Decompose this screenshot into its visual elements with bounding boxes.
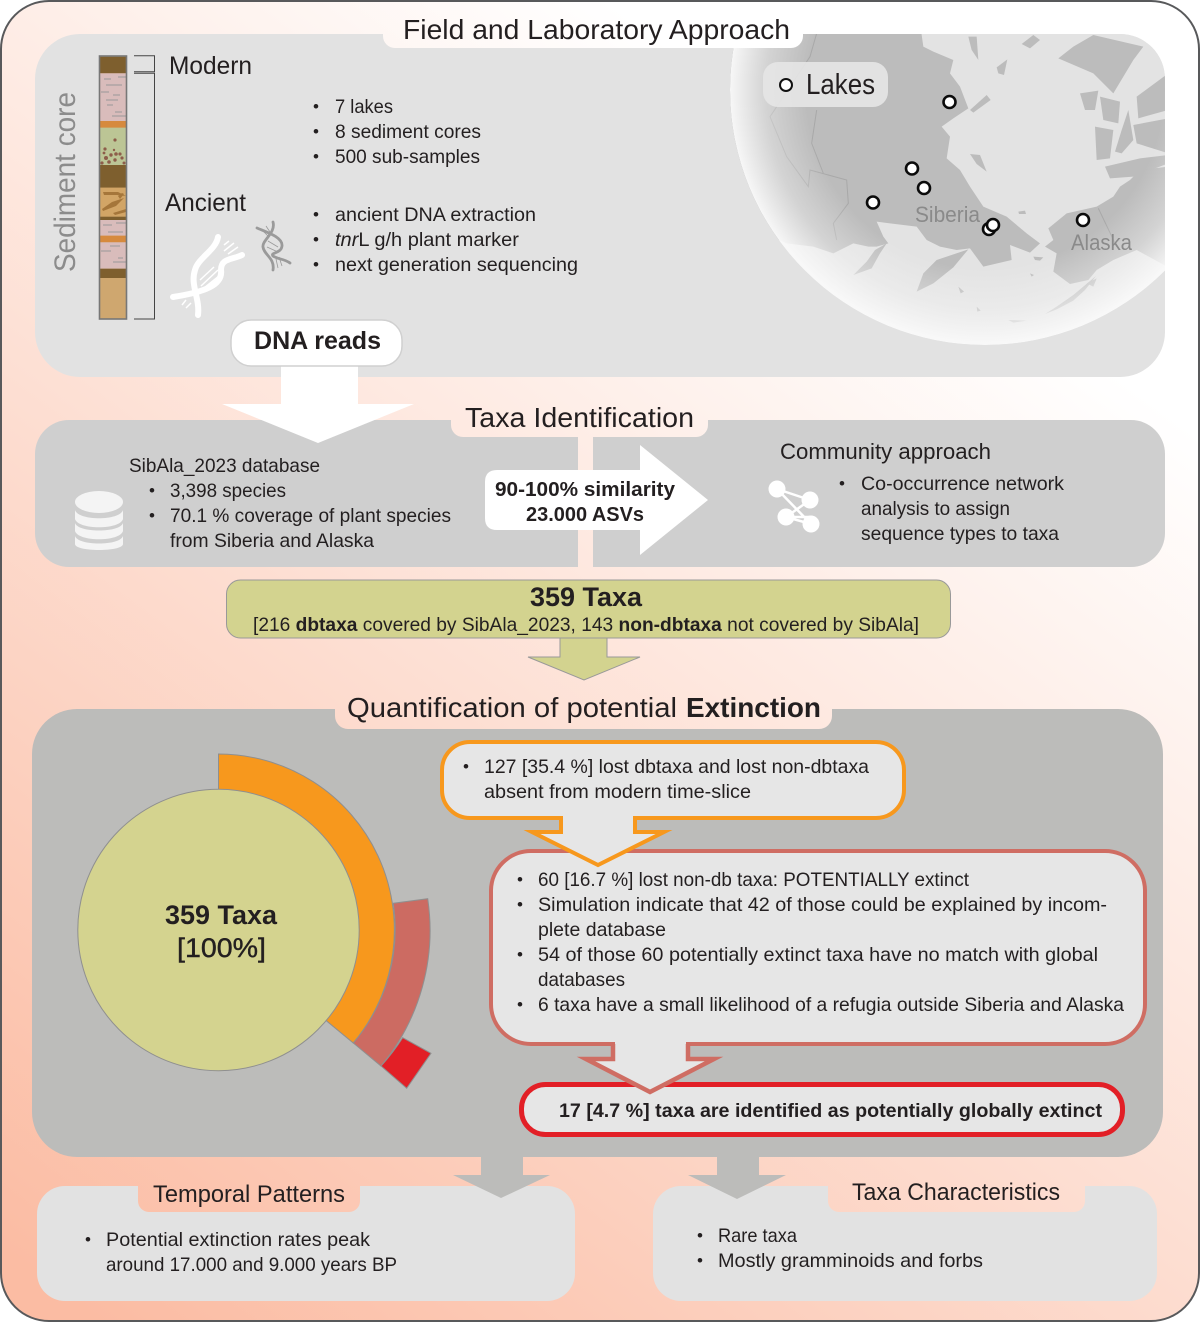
panel: taxa characteristics: • — [697, 1226, 703, 1245]
list: laboratory methods: • — [313, 255, 319, 274]
panel title: taxa identification: Taxa Identification — [465, 402, 694, 433]
panel title: field and laboratory approach — [383, 6, 803, 48]
chart label: 359 taxa — [165, 900, 278, 963]
panel title: taxa characteristics: Taxa Characteristics — [852, 1179, 1060, 1206]
list: field sampling: • — [313, 147, 319, 166]
panel title: field and laboratory approach: Field and Laboratory Approach — [403, 14, 790, 45]
box: 359 taxa summary: [216 dbtaxa covered by SibAla_2023, 143 non-dbtaxa not covered by SibAla] — [253, 614, 919, 636]
callout: lost taxa: • — [517, 870, 523, 889]
callout: lost taxa: • — [517, 995, 523, 1014]
text: SibAla database: 70.1 % coverage of plant species — [170, 505, 451, 527]
arrow: orange — [532, 814, 664, 865]
panel title: quantification of potential extinction — [335, 686, 832, 729]
arrow: pink — [586, 1040, 714, 1092]
callout: lost taxa: 60 [16.7 %] lost non-db taxa: POTENTIALLY extinct — [538, 869, 970, 891]
panel title: temporal patterns — [138, 1170, 360, 1212]
map label: Alaska: Alaska — [1071, 230, 1133, 255]
panel: field and laboratory approach — [35, 34, 1165, 377]
panel title: taxa characteristics — [828, 1170, 1085, 1212]
callout: absent from modern: • — [463, 757, 469, 776]
label: DNA reads: DNA reads — [254, 327, 381, 355]
text: SibAla database: • — [149, 481, 155, 500]
text: SibAla database — [129, 455, 451, 552]
label: sediment core: Sediment core — [49, 92, 82, 272]
arrow: similarity — [485, 445, 708, 555]
list: field sampling: 500 sub-samples — [335, 146, 480, 168]
text: community approach: • — [839, 474, 845, 493]
panel: temporal patterns: around 17.000 and 9.000 years BP — [106, 1254, 397, 1276]
arrow: to taxa characteristics — [688, 1155, 786, 1199]
panel: taxa characteristics — [653, 1186, 1157, 1301]
band: 359 taxa arrow — [528, 630, 640, 680]
label: Modern: Modern — [169, 52, 252, 80]
list: laboratory methods — [313, 204, 578, 276]
text: community approach: analysis to assign — [861, 498, 1010, 520]
callout: absent from modern: 127 [35.4 %] lost dbtaxa and lost non-dbtaxa — [484, 756, 869, 778]
panel: taxa characteristics: • — [697, 1251, 703, 1270]
legend: lakes: Lakes — [806, 69, 875, 101]
callout: lost taxa: 54 of those 60 potentially extinct taxa have no match with global — [538, 944, 1098, 966]
list: field sampling: • — [313, 122, 319, 141]
text: community approach: sequence types to taxa — [861, 523, 1059, 545]
panel: temporal patterns: Potential extinction rates peak — [106, 1229, 370, 1251]
text: SibAla database: 3,398 species — [170, 480, 286, 502]
list: laboratory methods: tnrL g/h plant marker — [335, 229, 520, 251]
callout: lost taxa: • — [517, 895, 523, 914]
text: SibAla database: from Siberia and Alaska — [170, 530, 374, 552]
label: DNA reads — [231, 320, 402, 366]
text: SibAla database: SibAla_2023 database — [129, 455, 320, 477]
arrow: DNA reads to taxa identification — [222, 360, 414, 443]
list: field sampling: 7 lakes — [335, 96, 393, 118]
list: laboratory methods: next generation sequencing — [335, 254, 578, 276]
map label: Siberia: Siberia — [915, 202, 981, 227]
label: Ancient: Ancient — [165, 189, 246, 217]
callout: globally extinct: 17 [4.7 %] taxa are identified as potentially globally extinct — [559, 1100, 1102, 1122]
panel: taxa characteristics: Rare taxa — [718, 1225, 797, 1247]
chart: nested taxa wheel — [78, 754, 431, 1088]
text: community approach: Community approach — [780, 439, 991, 464]
icon: network — [768, 480, 820, 532]
panel: temporal patterns: • — [85, 1230, 91, 1249]
callout: globally extinct — [522, 1084, 1122, 1134]
text: community approach — [780, 439, 1064, 545]
callout: lost taxa: databases — [538, 969, 625, 991]
panel: taxa characteristics: Mostly gramminoids and forbs — [718, 1250, 983, 1272]
callout: absent from modern — [442, 742, 904, 818]
brackets — [134, 56, 154, 319]
panel: quantification of potential extinction — [32, 709, 1163, 1157]
arrow: similarity: 90-100% similarity — [495, 479, 676, 501]
icon: grey DNA helix — [257, 222, 290, 270]
chart label: 359 taxa: [100%] — [177, 933, 266, 963]
panel: taxa identification — [35, 420, 1165, 570]
sediment core column — [100, 56, 126, 319]
panel title: temporal patterns: Temporal Patterns — [153, 1181, 345, 1208]
text: SibAla database: • — [149, 506, 155, 525]
list: laboratory methods: • — [313, 205, 319, 224]
icon: database — [75, 491, 123, 550]
box: 359 taxa summary — [226, 580, 950, 638]
list: laboratory methods: • — [313, 230, 319, 249]
callout: lost taxa — [491, 851, 1145, 1044]
list: laboratory methods: ancient DNA extraction — [335, 204, 536, 226]
callout: lost taxa: Simulation indicate that 42 of those could be explained by incom- — [538, 894, 1107, 916]
callout: lost taxa: • — [517, 945, 523, 964]
callout: lost taxa: plete database — [538, 919, 666, 941]
panel title: quantification of potential extinction: Extinction — [686, 692, 821, 723]
callout: lost taxa: 6 taxa have a small likelihood of a refugia outside Siberia and Alaska — [538, 994, 1124, 1016]
list: field sampling — [313, 96, 481, 168]
map: globe with lakes — [730, 34, 1165, 345]
arrow: to temporal patterns — [453, 1155, 550, 1198]
list: field sampling: • — [313, 97, 319, 116]
panel title: taxa identification — [451, 396, 708, 437]
legend: lakes — [763, 62, 888, 107]
panel: temporal patterns — [37, 1186, 575, 1301]
arrow: similarity: 23.000 ASVs — [526, 504, 644, 526]
box: 359 taxa summary: 359 Taxa — [530, 582, 643, 612]
callout: absent from modern: absent from modern time-slice — [484, 781, 751, 803]
text: community approach: Co-occurrence network — [861, 473, 1064, 495]
lake markers — [867, 96, 1089, 235]
chart label: 359 taxa: 359 Taxa — [165, 900, 278, 930]
panel title: quantification of potential extinction: Quantification of potential — [347, 692, 677, 723]
icon: white DNA helix — [173, 237, 242, 315]
list: field sampling: 8 sediment cores — [335, 121, 481, 143]
